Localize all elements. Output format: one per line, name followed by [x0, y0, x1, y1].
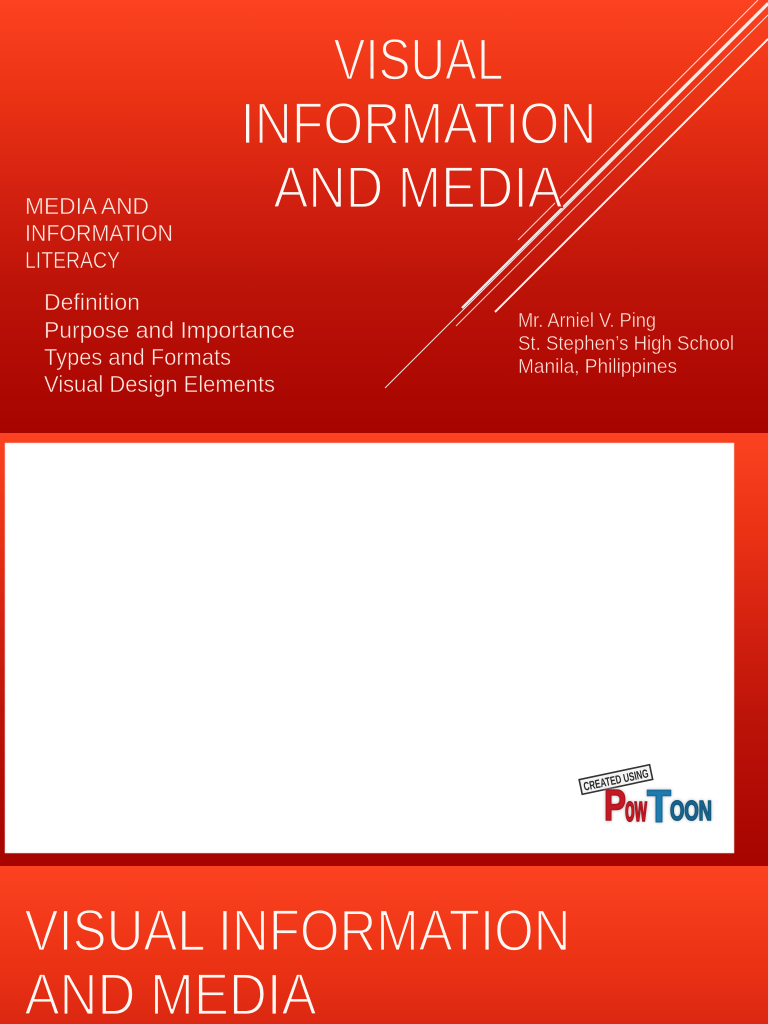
- author details: Manila, Philippines: [518, 355, 677, 378]
- subtitle: media and information literacy: LITERACY: [25, 247, 120, 273]
- topic list: Definition: [44, 289, 140, 315]
- topic list: Visual Design Elements: [44, 371, 275, 397]
- panel: video slide: [0, 433, 768, 866]
- decorative diagonal lines: [385, 0, 768, 388]
- subtitle: media and information literacy: [25, 193, 173, 273]
- author details: [518, 309, 734, 378]
- title: [240, 28, 596, 220]
- created using badge: CREATED USING: [582, 766, 650, 794]
- author details: Mr. Arniel V. Ping: [518, 309, 656, 332]
- title: AND MEDIA: [274, 156, 563, 220]
- icon: created using powtoon logo: [579, 765, 712, 832]
- white video frame: [5, 443, 734, 853]
- panel: next slide: [0, 866, 768, 1024]
- heading: [24, 898, 570, 1024]
- powtoon wordmark: OON: [670, 795, 712, 826]
- title: VISUAL: [334, 28, 504, 92]
- powtoon wordmark: ow: [625, 788, 647, 829]
- powtoon wordmark: [604, 781, 712, 832]
- powtoon wordmark: T: [647, 781, 671, 832]
- subtitle: media and information literacy: INFORMATION: [25, 220, 173, 246]
- panel: title slide: [0, 0, 768, 433]
- powtoon wordmark: P: [604, 781, 626, 830]
- topic list: Purpose and Importance: [44, 317, 295, 343]
- subtitle: media and information literacy: MEDIA AND: [25, 193, 149, 219]
- author details: St. Stephen’s High School: [518, 332, 734, 355]
- topic list: Types and Formats: [44, 344, 231, 370]
- title: INFORMATION: [240, 92, 596, 156]
- heading: VISUAL INFORMATION: [24, 898, 570, 964]
- topic list: [44, 289, 295, 397]
